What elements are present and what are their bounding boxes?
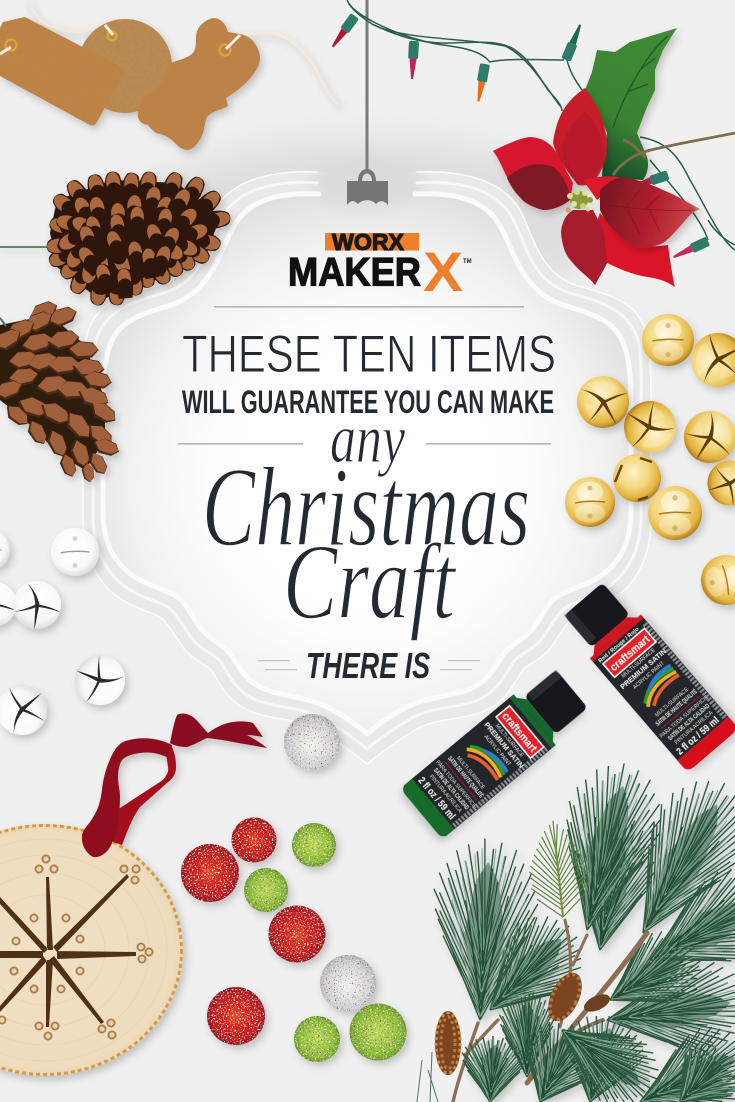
logo: WORX MakerX	[288, 229, 472, 303]
logo: WORX MakerX: WORX	[332, 229, 404, 255]
petal: lower left	[561, 210, 607, 285]
petal: lower right bright	[592, 213, 675, 287]
string on tags	[27, 0, 338, 105]
paint bottle: red: ACRYLIC PAINT	[632, 660, 666, 691]
paint bottle: green: ACRYLIC PAINT	[483, 734, 512, 768]
rectangular tag	[0, 17, 123, 126]
paint bottle: green: craftsmart	[499, 711, 539, 755]
petal: large right	[600, 177, 700, 248]
paint bottle: red: SATIN DE HAUTE QUALITÉ	[653, 687, 699, 728]
green balls	[244, 823, 406, 1062]
paint bottle: red: PINTURA ACRÍLICA	[673, 709, 715, 746]
branch stems	[453, 920, 647, 1102]
light young tuft	[524, 818, 592, 920]
stem	[613, 133, 735, 175]
glitter balls	[181, 714, 406, 1062]
wood disc	[0, 824, 183, 1076]
paint bottle: red: craftsmart	[608, 633, 653, 674]
paint bottle: green	[400, 663, 593, 839]
paint bottle: red: PARA TODA SUPERFICIE	[659, 694, 710, 740]
red velvet ribbon	[82, 714, 267, 857]
bulb: lower right magenta	[671, 236, 710, 262]
string lights	[329, 0, 735, 262]
silver jingle bells	[0, 528, 134, 736]
bulb: magenta	[407, 41, 419, 79]
back needle tufts	[427, 753, 735, 1077]
paint bottle: red	[558, 577, 735, 772]
logo: WORX MakerX: TM	[463, 259, 472, 265]
petal veins	[606, 190, 695, 235]
pine branch	[417, 753, 735, 1102]
petal: top	[553, 88, 607, 185]
paint bottle: green: PINTURA ACRÍLICA	[428, 773, 463, 815]
paint bottle: red: 2 fl oz / 59 ml	[675, 715, 722, 758]
paint bottle: green: MULTI-SURFACE	[494, 723, 525, 759]
logo: WORX MakerX: X	[423, 240, 463, 303]
paint bottle: green: MULTI-SURFACE	[455, 755, 486, 791]
heading: these ten items: THESE TEN ITEMS	[182, 325, 556, 384]
paint bottle: green: SATÍN DE ALTA CALIDAD	[432, 767, 471, 812]
light wires	[347, 0, 735, 250]
subheading: will guarantee you can make: WILL GUARANTEE YOU CAN MAKE	[182, 384, 554, 420]
paint bottle: red: SATÍN DE ALTA CALIDAD	[665, 701, 711, 742]
side rules around any	[178, 443, 551, 445]
paint bottle: red: MULTI-SURFACE	[621, 647, 657, 680]
red balls	[181, 818, 326, 1045]
round tag	[78, 19, 172, 113]
paint bottle: green: PREMIUM SATIN	[482, 720, 526, 770]
script: Christmas: Christmas	[202, 445, 530, 570]
paint bottle: green: 2 fl oz / 59 ml	[415, 775, 457, 822]
script: Craft: Craft	[283, 523, 457, 642]
thin grass needles	[417, 1052, 438, 1102]
flower center	[565, 189, 593, 213]
paint bottle: red: MULTI-SURFACE	[654, 686, 690, 719]
footer phrase: there is: THERE IS	[306, 645, 430, 686]
silver balls	[284, 714, 376, 1011]
petal: left	[493, 137, 573, 210]
eyelets	[6, 32, 230, 56]
bulb: lower right	[630, 170, 670, 191]
small pine cones	[435, 968, 613, 1075]
panel: ornate plaque frame	[83, 156, 651, 764]
bracket tag	[138, 18, 260, 150]
script: any: any	[330, 401, 406, 478]
poinsettia flower	[493, 28, 735, 287]
paint bottle: green: SATIN DE HAUTE QUALITÉ	[446, 755, 485, 799]
pine cone: upper	[0, 170, 232, 307]
logo: WORX MakerX: MAKER	[288, 250, 421, 294]
burned dots	[0, 855, 153, 1040]
burned star	[0, 874, 136, 1027]
bulb: red	[329, 13, 359, 50]
kraft paper gift tags	[0, 0, 338, 150]
front needle tufts	[458, 1000, 735, 1102]
bulb: green	[561, 23, 585, 62]
gold jingle bells	[565, 314, 735, 609]
divider rule	[214, 306, 524, 308]
bulb: orange	[473, 63, 490, 102]
paint bottle: green: PARA TODA SUPERFICIE	[434, 760, 478, 811]
wood slice ornament	[0, 714, 267, 1076]
pine cone: lower	[0, 297, 122, 483]
green leaf	[585, 28, 677, 180]
hanging tag icon	[347, 0, 388, 205]
leaf vein	[613, 36, 668, 128]
paint bottle: red: PREMIUM SATIN	[618, 647, 668, 691]
petal: small middle	[583, 176, 620, 200]
paint bottle: red: Red / Rouge / Rojo	[597, 626, 641, 664]
